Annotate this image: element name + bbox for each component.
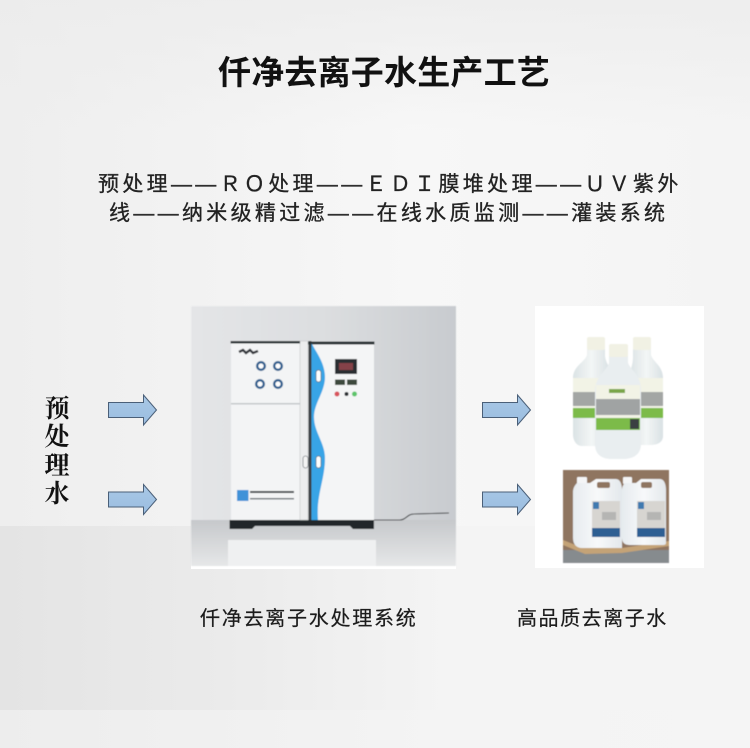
photo: water treatment machine xyxy=(191,306,456,569)
arrow: upper left xyxy=(108,395,156,425)
arrow: upper right xyxy=(482,395,530,425)
jug left xyxy=(573,477,622,548)
power cord xyxy=(374,513,449,520)
door divider xyxy=(308,341,312,520)
right cabinet door xyxy=(311,343,374,520)
process description text xyxy=(98,172,682,225)
bottle front xyxy=(595,344,641,459)
photo: three bottles xyxy=(573,337,663,459)
machine base xyxy=(230,520,374,529)
control buttons xyxy=(334,392,340,396)
process description text: 线——纳米级精过滤——在线水质监测——灌装系统 xyxy=(109,202,668,225)
nameplate xyxy=(237,490,248,501)
blue wave panel xyxy=(312,344,325,520)
jug right xyxy=(622,477,666,545)
title: 仟净去离子水生产工艺 xyxy=(218,54,550,91)
control screen xyxy=(335,359,357,374)
gauges xyxy=(256,362,282,388)
bottle right xyxy=(630,337,663,445)
arrows: left pair xyxy=(108,395,156,514)
cabinet top edge xyxy=(230,341,300,344)
vertical label: pretreated water: 预处理水 xyxy=(44,396,70,508)
bottle left xyxy=(573,337,610,446)
left cabinet door xyxy=(231,341,300,520)
photo: water products backdrop xyxy=(535,306,704,568)
caption: treatment system: 仟净去离子水处理系统 xyxy=(200,608,418,630)
door handles xyxy=(316,370,321,382)
photo: two plastic jugs xyxy=(563,470,669,563)
caption: product: 高品质去离子水 xyxy=(517,608,668,630)
process description text: 预处理——ＲＯ处理——ＥＤＩ膜堆处理——ＵＶ紫外 xyxy=(98,173,682,196)
machine reflection xyxy=(228,540,376,566)
logo mark xyxy=(239,350,258,353)
arrows: right pair xyxy=(482,395,530,514)
arrow: lower left xyxy=(108,484,156,514)
arrow: lower right xyxy=(482,484,530,514)
